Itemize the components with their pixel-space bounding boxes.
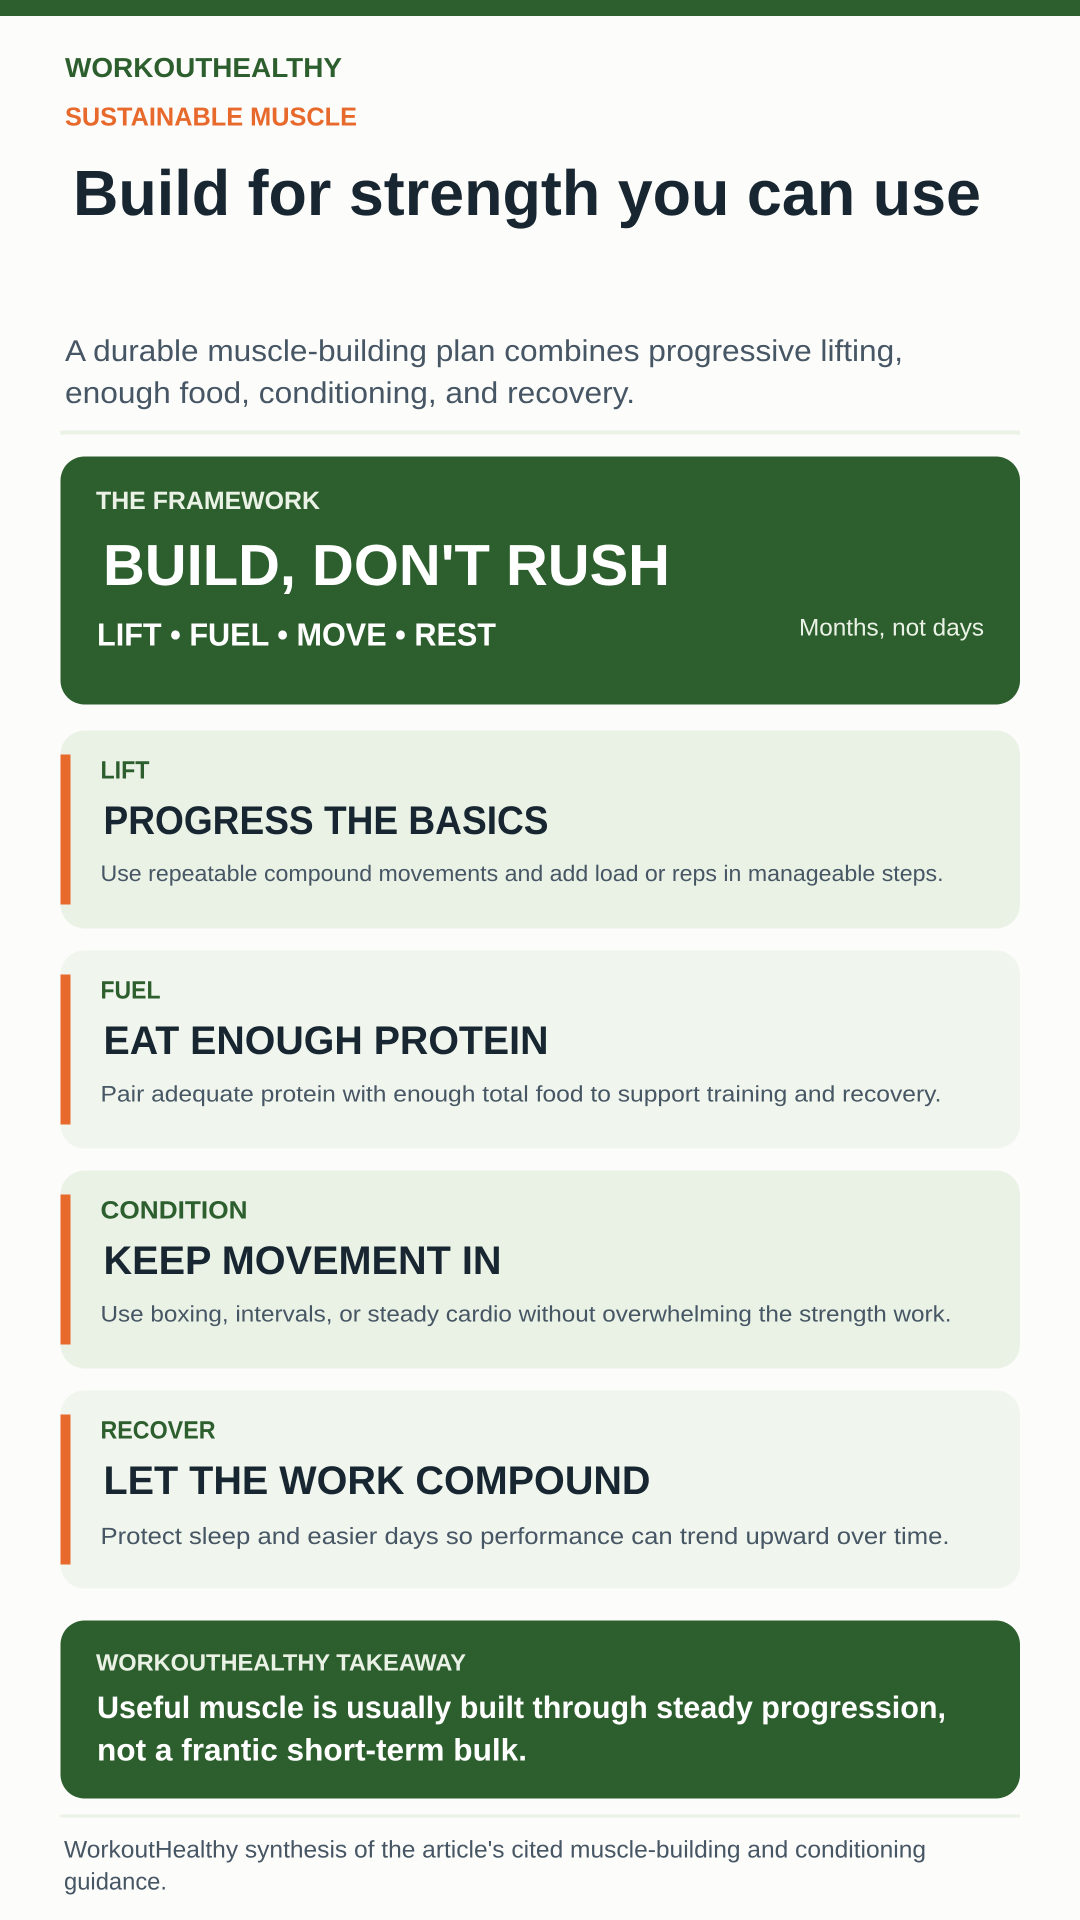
framework timeframe: Months, not days	[799, 614, 984, 642]
takeaway message: Useful muscle is usually built through steady progression,	[97, 1690, 946, 1725]
condition heading: KEEP MOVEMENT IN	[104, 1239, 502, 1283]
recover heading: LET THE WORK COMPOUND	[104, 1459, 650, 1503]
footer source note: WorkoutHealthy synthesis of the article's cited muscle-building and conditioning	[64, 1836, 926, 1864]
fuel description: Pair adequate protein with enough total food to support training and recovery.	[100, 1082, 942, 1106]
fuel label: FUEL	[100, 976, 160, 1004]
takeaway label: WORKOUTHEALTHY TAKEAWAY	[96, 1650, 466, 1676]
lift heading: PROGRESS THE BASICS	[104, 799, 548, 843]
condition description: Use boxing, intervals, or steady cardio without overwhelming the strength work.	[100, 1302, 952, 1326]
takeaway message	[97, 1690, 946, 1768]
panel: takeaway	[60, 1620, 1020, 1798]
lift label: LIFT	[100, 756, 150, 784]
framework label: THE FRAMEWORK	[96, 487, 320, 515]
panel: the framework	[60, 456, 1020, 704]
subtitle	[65, 335, 903, 410]
lift description: Use repeatable compound movements and add load or reps in manageable steps.	[100, 861, 944, 886]
subtitle: enough food, conditioning, and recovery.	[65, 377, 635, 410]
panel: condition	[60, 1170, 1020, 1368]
panel: fuel	[60, 950, 1020, 1148]
brand name: WORKOUTHEALTHY	[65, 52, 342, 83]
framework headline: BUILD, DON'T RUSH	[103, 533, 670, 598]
panel: recover	[60, 1390, 1020, 1588]
subtitle: A durable muscle-building plan combines progressive lifting,	[65, 335, 903, 368]
footer source note	[64, 1836, 926, 1896]
recover description: Protect sleep and easier days so performance can trend upward over time.	[100, 1523, 950, 1549]
footer source note: guidance.	[64, 1868, 167, 1896]
title: Build for strength you can use	[73, 157, 981, 229]
panel: lift	[60, 730, 1020, 928]
framework pillars: LIFT • FUEL • MOVE • REST	[97, 616, 496, 652]
fuel heading: EAT ENOUGH PROTEIN	[104, 1019, 548, 1063]
recover label: RECOVER	[100, 1416, 216, 1444]
takeaway message: not a frantic short-term bulk.	[97, 1732, 527, 1768]
condition label: CONDITION	[100, 1196, 248, 1224]
eyebrow: sustainable muscle: SUSTAINABLE MUSCLE	[65, 102, 357, 132]
